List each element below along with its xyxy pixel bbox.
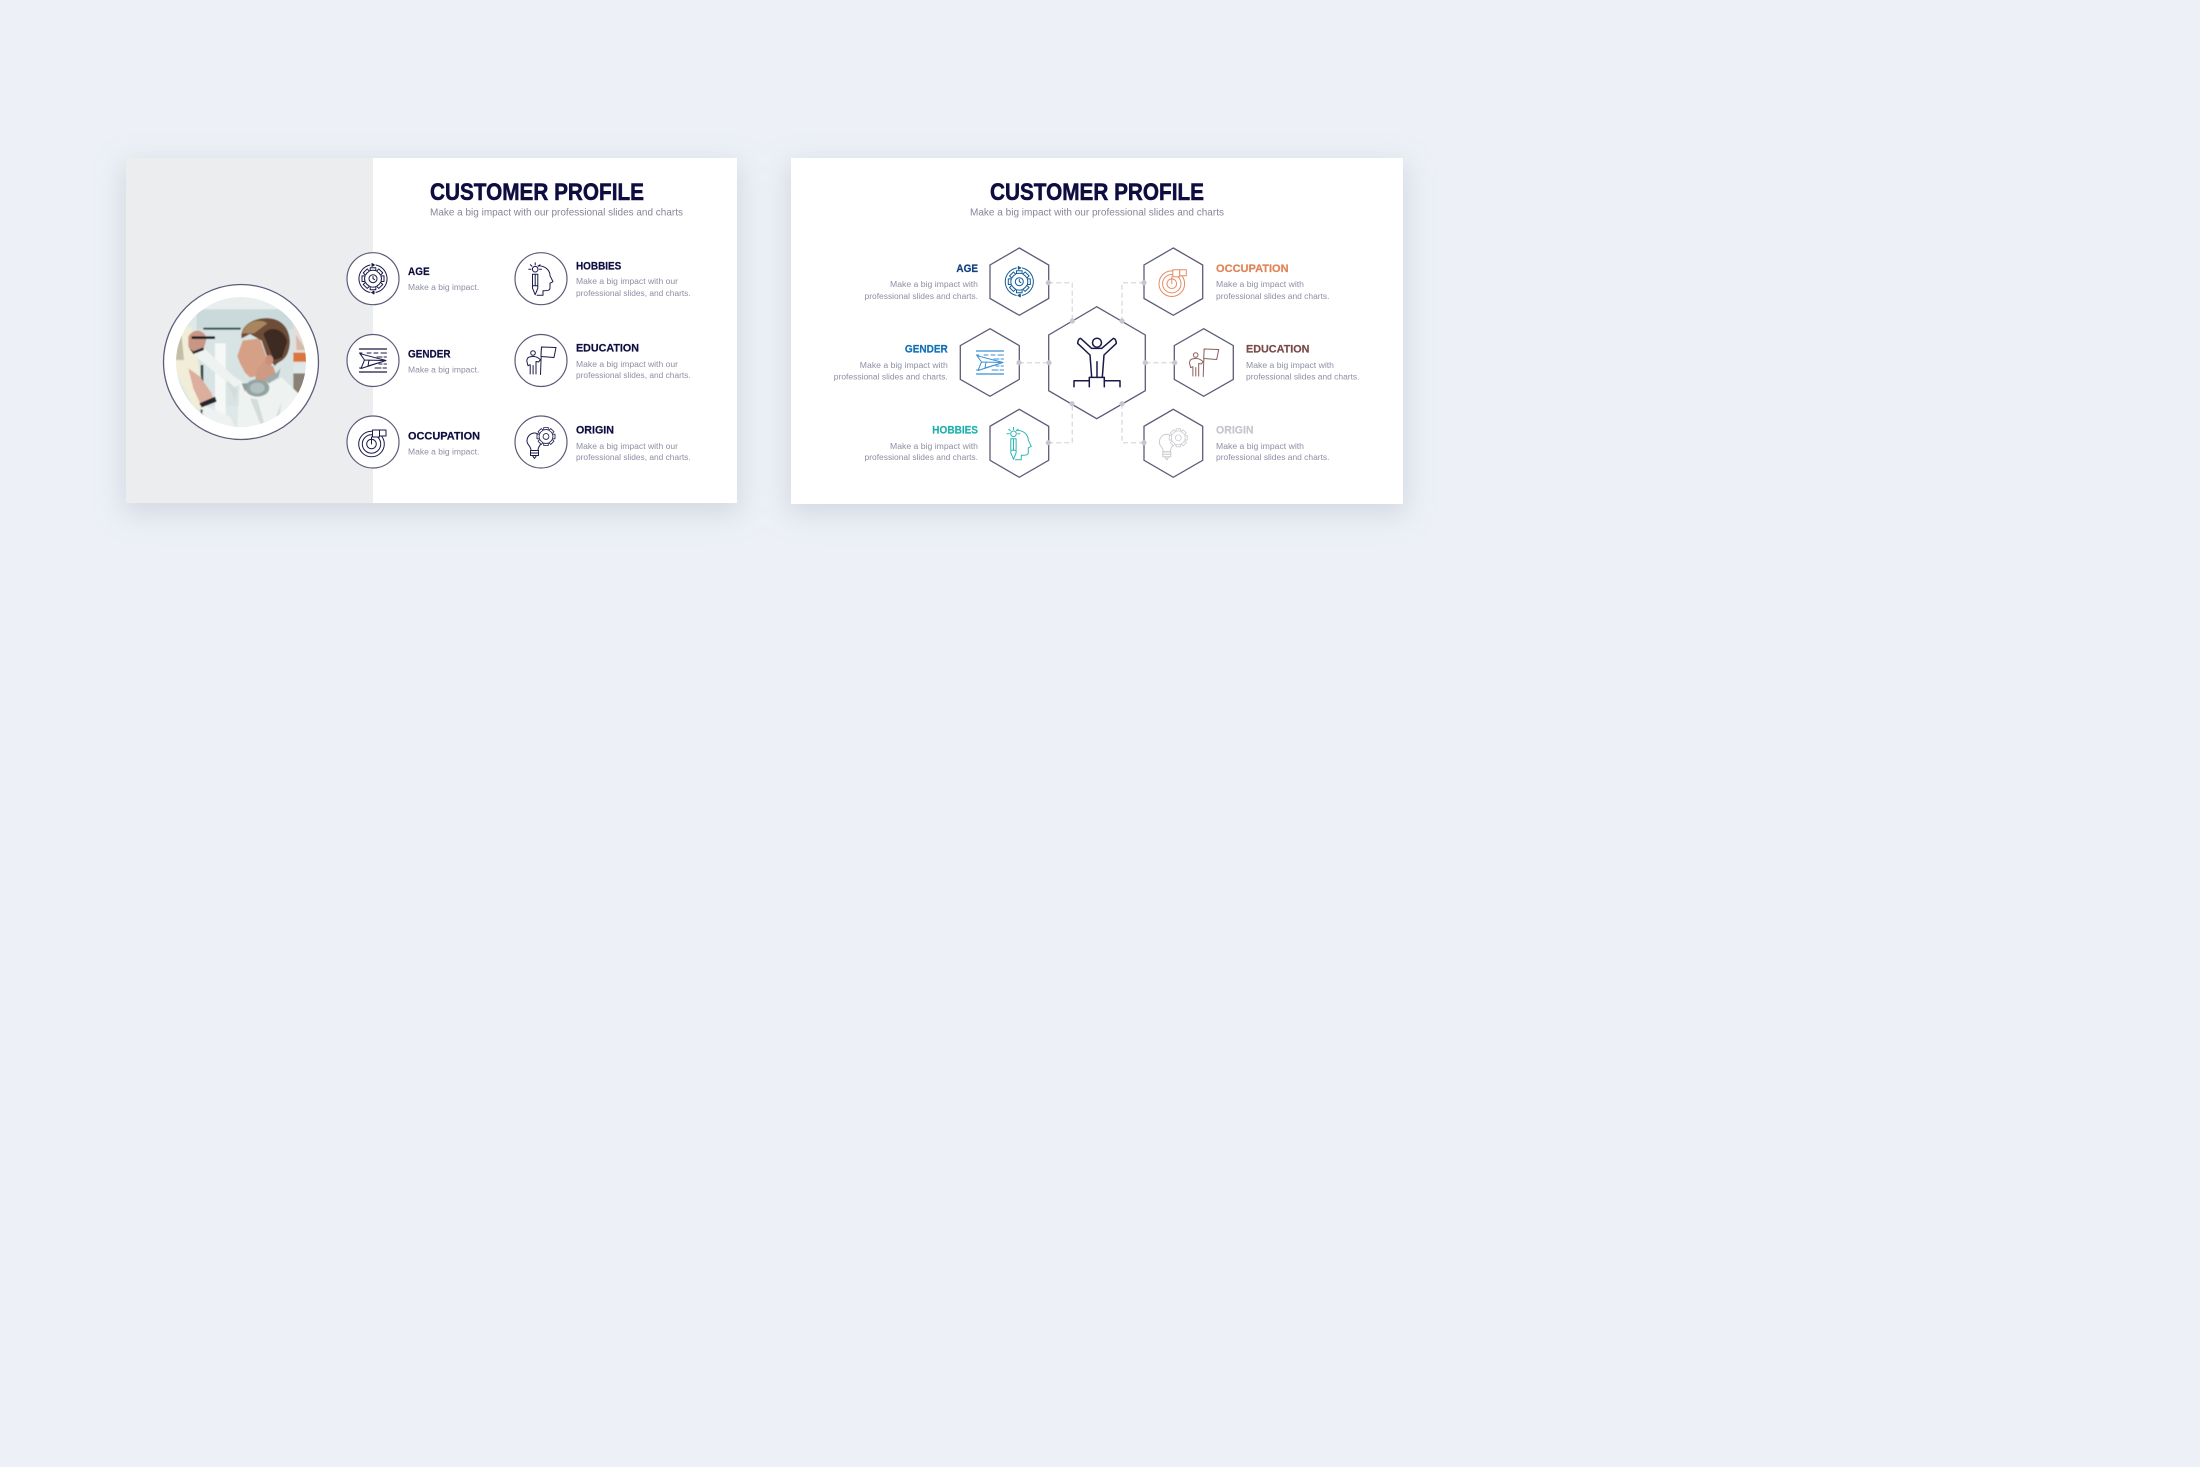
- hexagon: occupation: [1144, 248, 1203, 315]
- occupation text block: professional slides and charts.: [1216, 292, 1330, 301]
- hobbies text block: [864, 424, 978, 462]
- age text block: AGE: [956, 263, 978, 275]
- row: age: [347, 253, 479, 305]
- hobbies description: Make a big impact with our: [576, 277, 678, 286]
- icon: occupation target: [347, 416, 399, 468]
- gender description: Make a big impact.: [408, 366, 479, 374]
- icon: hobbies head and pencil: [515, 253, 567, 305]
- icon: gender: [976, 351, 1004, 374]
- dashed connectors: [1019, 283, 1175, 443]
- hexagon: age: [990, 248, 1049, 315]
- panel: slide 1 customer profile with photo: [126, 158, 737, 503]
- hexagon: gender: [960, 329, 1019, 396]
- row: occupation: [347, 416, 480, 468]
- origin description: Make a big impact with our: [576, 442, 678, 451]
- education text block: Make a big impact with: [1246, 361, 1334, 370]
- age text block: [864, 263, 978, 301]
- slide 1 grey side panel: [126, 158, 373, 503]
- icon: education person with flag: [515, 334, 567, 386]
- shadows: [122, 163, 1407, 515]
- origin text block: [1216, 424, 1330, 462]
- row: education: [515, 334, 691, 386]
- age description: Make a big impact.: [408, 283, 479, 292]
- education description: Make a big impact with our: [576, 360, 678, 369]
- hobbies text block: professional slides and charts.: [864, 453, 978, 462]
- hexagon: origin: [1144, 409, 1203, 477]
- age text block: Make a big impact with: [890, 280, 978, 289]
- hobbies text block: HOBBIES: [932, 424, 978, 436]
- gender heading: GENDER: [408, 348, 451, 360]
- hexagon: education: [1174, 329, 1233, 396]
- icon: education: [1190, 349, 1219, 376]
- origin text block: professional slides and charts.: [1216, 453, 1330, 462]
- icon: occupation: [1159, 270, 1186, 296]
- slide 1 subtitle: Make a big impact with our professional slides and charts: [430, 208, 683, 218]
- icon: hobbies: [1007, 427, 1031, 460]
- education text block: [1246, 344, 1360, 382]
- occupation text block: OCCUPATION: [1216, 263, 1289, 275]
- origin heading: ORIGIN: [576, 424, 614, 436]
- icon: origin bulb and gear: [515, 416, 567, 468]
- hobbies text block: Make a big impact with: [890, 442, 978, 451]
- photo portrait in circle: [164, 284, 318, 440]
- row: origin: [515, 416, 691, 468]
- row: gender: [347, 334, 479, 386]
- hexagon: center person: [1049, 307, 1145, 419]
- occupation heading: OCCUPATION: [408, 431, 480, 443]
- occupation text block: Make a big impact with: [1216, 280, 1304, 289]
- gender text block: Make a big impact with: [860, 361, 948, 370]
- icon: origin: [1159, 429, 1187, 460]
- gender text block: professional slides and charts.: [834, 372, 948, 382]
- origin description: professional slides, and charts.: [576, 453, 691, 462]
- occupation text block: [1216, 263, 1330, 301]
- origin text block: Make a big impact with: [1216, 442, 1304, 451]
- hobbies heading: HOBBIES: [576, 260, 621, 272]
- gender text block: GENDER: [905, 344, 948, 356]
- slide 2 subtitle: Make a big impact with our professional slides and charts: [970, 208, 1224, 218]
- row: hobbies: [515, 253, 691, 305]
- connector dots: [1016, 280, 1177, 445]
- icon: age: [1005, 266, 1033, 297]
- slide 1 title: CUSTOMER PROFILE: [430, 179, 644, 206]
- slide 2 title: CUSTOMER PROFILE: [990, 179, 1204, 206]
- education text block: professional slides and charts.: [1246, 372, 1360, 382]
- education text block: EDUCATION: [1246, 344, 1309, 356]
- age text block: professional slides and charts.: [864, 292, 978, 301]
- slide 2 background: [791, 158, 1403, 504]
- hexagon: hobbies: [990, 409, 1049, 477]
- education heading: EDUCATION: [576, 343, 639, 355]
- origin text block: ORIGIN: [1216, 424, 1254, 436]
- icon: age gear clock: [347, 253, 399, 305]
- hobbies description: professional slides, and charts.: [576, 289, 691, 298]
- occupation description: Make a big impact.: [408, 448, 479, 456]
- icon: person with raised arms on podium: [1074, 338, 1120, 387]
- education description: professional slides, and charts.: [576, 371, 691, 380]
- gender text block: [834, 344, 948, 382]
- age heading: AGE: [408, 266, 430, 278]
- icon: gender paper plane: [347, 334, 399, 386]
- panel: slide 2 hexagon diagram: [791, 158, 1403, 504]
- slide 1 background: [126, 158, 737, 503]
